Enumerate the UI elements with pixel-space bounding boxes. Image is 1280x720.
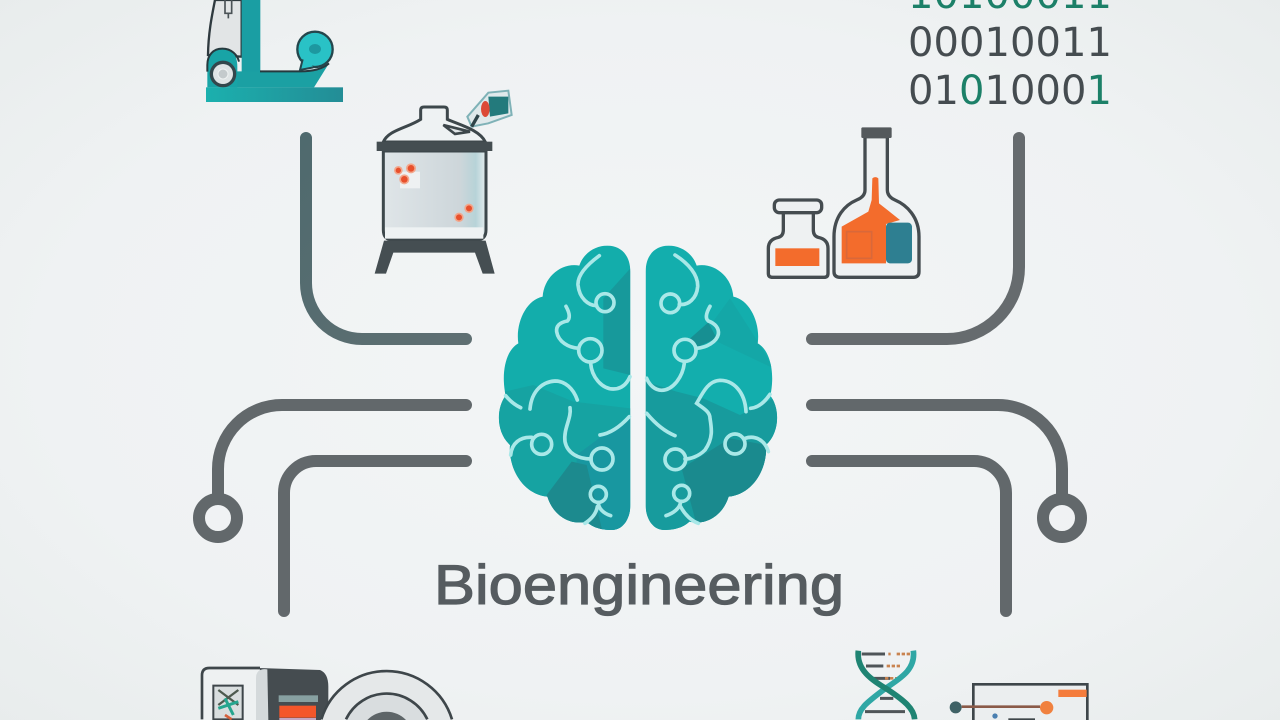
icon: roller machine — [206, 0, 343, 102]
icon: sequencer machine and centrifuge — [202, 668, 452, 720]
icon: bioreactor tank — [375, 91, 512, 274]
connector: middle right with ring — [812, 405, 1081, 537]
connector: top left — [306, 138, 466, 339]
icon: binary digits: 00010011 — [908, 20, 1112, 66]
brain: right hemisphere — [646, 246, 778, 530]
icon: flask — [834, 127, 919, 277]
icon: binary digits — [908, 0, 1112, 114]
icon: small jar — [768, 200, 828, 277]
icon: data chart panel — [950, 684, 1087, 720]
brain: left circuit traces — [506, 256, 630, 523]
title: Bioengineering — [434, 553, 844, 616]
connector: top right — [812, 138, 1019, 339]
brain — [498, 246, 778, 530]
brain: left hemisphere — [498, 246, 630, 530]
brain: right circuit traces — [647, 255, 770, 523]
connector: lower left — [284, 461, 466, 611]
connector: lower right — [812, 461, 1006, 611]
icon: binary digits: 01010001 — [908, 68, 1112, 114]
icon: DNA helix — [858, 651, 915, 719]
connector: middle left with ring — [199, 405, 466, 537]
